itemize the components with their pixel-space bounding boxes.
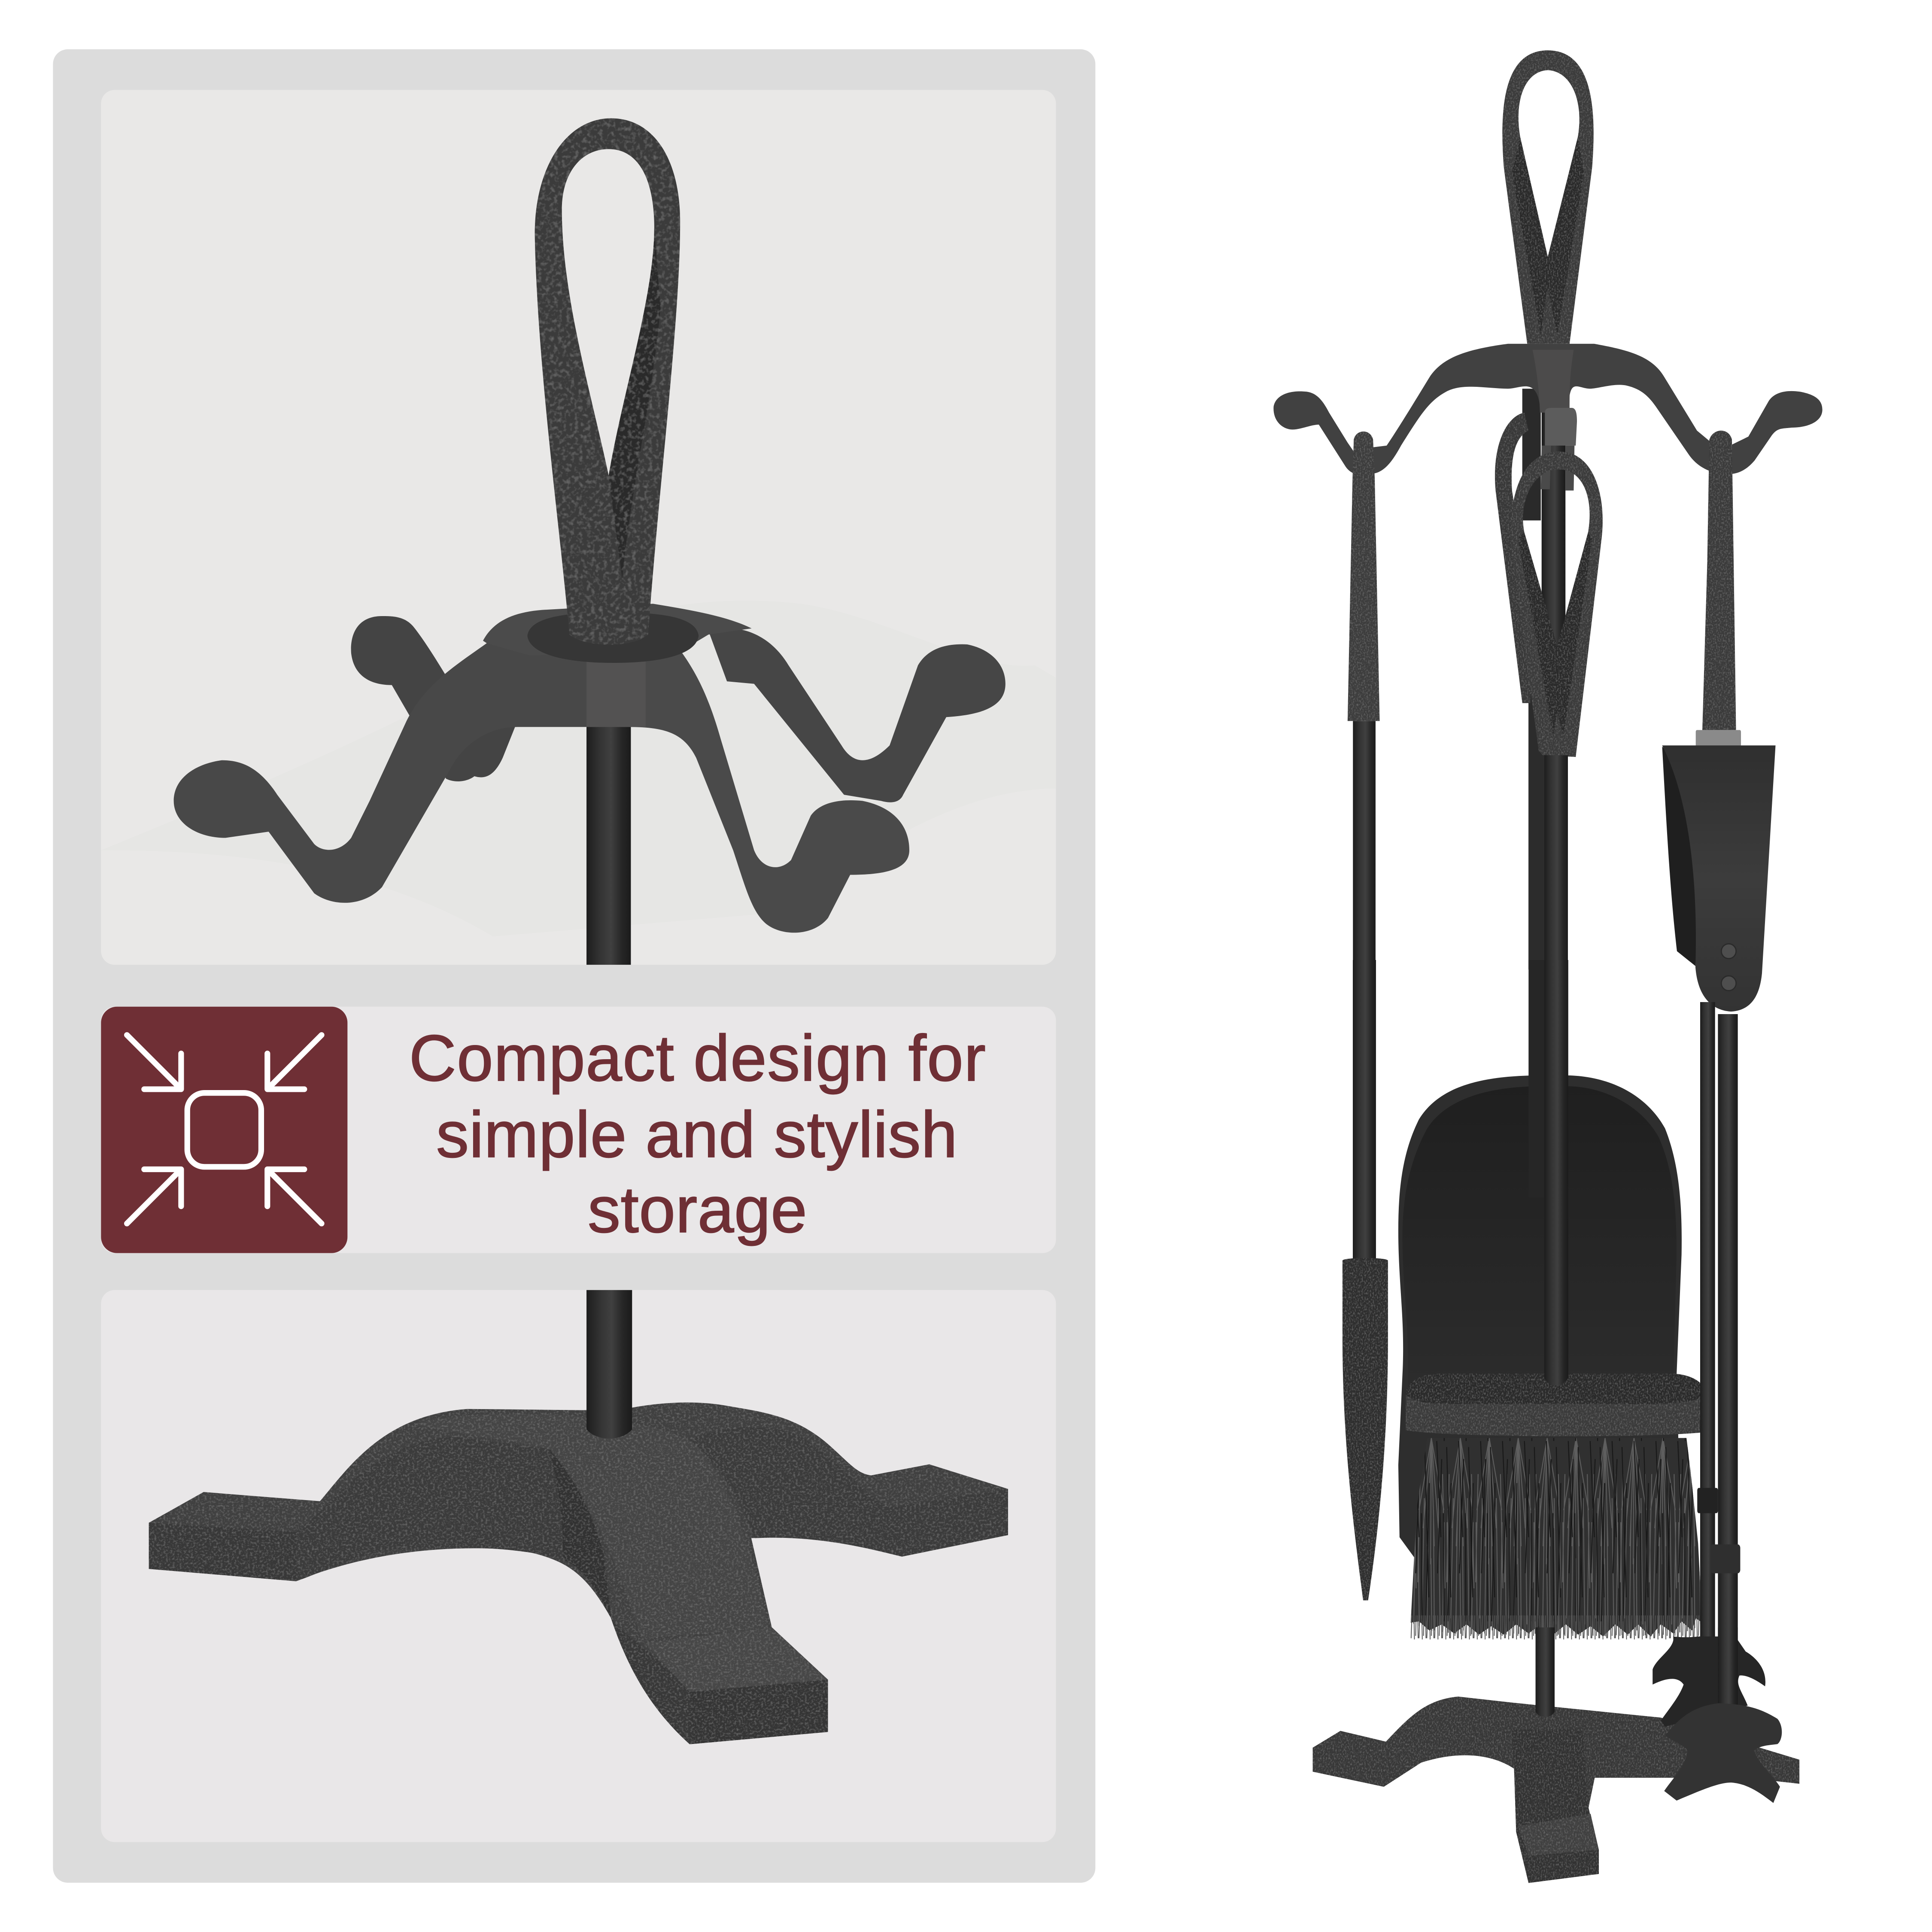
icon: hanger loop handle xyxy=(535,118,680,645)
lower tool set xyxy=(1313,960,1799,1883)
hub front highlight xyxy=(586,659,646,727)
rod in base xyxy=(1536,1628,1555,1717)
central rod lower xyxy=(586,1290,632,1439)
arm: front right xyxy=(592,647,909,933)
product: fireplace tool set xyxy=(1273,50,1823,1883)
heading: feature text: storage xyxy=(588,1173,807,1246)
hub top xyxy=(483,604,752,671)
nut xyxy=(1696,730,1741,747)
center rod xyxy=(1544,755,1568,971)
rod over rear claw xyxy=(1718,1628,1738,1706)
center rod xyxy=(1544,960,1568,1385)
panel: top hanger close-up xyxy=(101,90,1056,965)
panel: compact design detail card xyxy=(53,49,1095,1883)
brush bristles xyxy=(1411,1438,1702,1640)
arm: back left xyxy=(351,616,517,781)
top loop xyxy=(1502,50,1594,344)
poker spike xyxy=(1343,960,1388,1601)
heading: feature text: simple and stylish xyxy=(436,1098,957,1171)
rod in brush head xyxy=(1544,1327,1568,1385)
tongs rods xyxy=(1697,1002,1740,1706)
panel: feature caption xyxy=(101,1007,1056,1253)
tongs head xyxy=(1662,745,1776,1012)
heading: feature text xyxy=(409,1022,986,1246)
arm: back right xyxy=(708,628,1005,802)
tool stand upper xyxy=(1273,50,1823,972)
panel: base close-up xyxy=(101,1290,1056,1842)
stand arms xyxy=(1273,344,1823,475)
dustpan xyxy=(1398,1075,1682,1558)
left rod xyxy=(1353,721,1376,972)
heading: feature text: Compact design for xyxy=(409,1022,986,1095)
base xyxy=(1313,1697,1799,1883)
front handle loop xyxy=(1511,452,1603,757)
tongs rear claw xyxy=(1653,1637,1765,1727)
tongs front claw xyxy=(1664,1703,1782,1803)
bracket hook xyxy=(1541,408,1577,490)
central rod upper xyxy=(586,721,631,965)
icon: rivets xyxy=(1721,944,1736,990)
rear rods xyxy=(1522,389,1565,969)
hub stem xyxy=(1533,350,1574,413)
brush head xyxy=(1406,1374,1706,1436)
right handle xyxy=(1702,431,1736,730)
icon: compact arrows xyxy=(101,1007,347,1253)
socket xyxy=(527,612,699,663)
cast iron base xyxy=(149,1403,1008,1744)
hanger arms and hub xyxy=(174,604,1005,933)
arm: front left xyxy=(174,643,610,903)
rear rod xyxy=(1528,960,1555,1721)
left handle xyxy=(1348,431,1379,721)
rear handle loop xyxy=(1495,413,1533,703)
